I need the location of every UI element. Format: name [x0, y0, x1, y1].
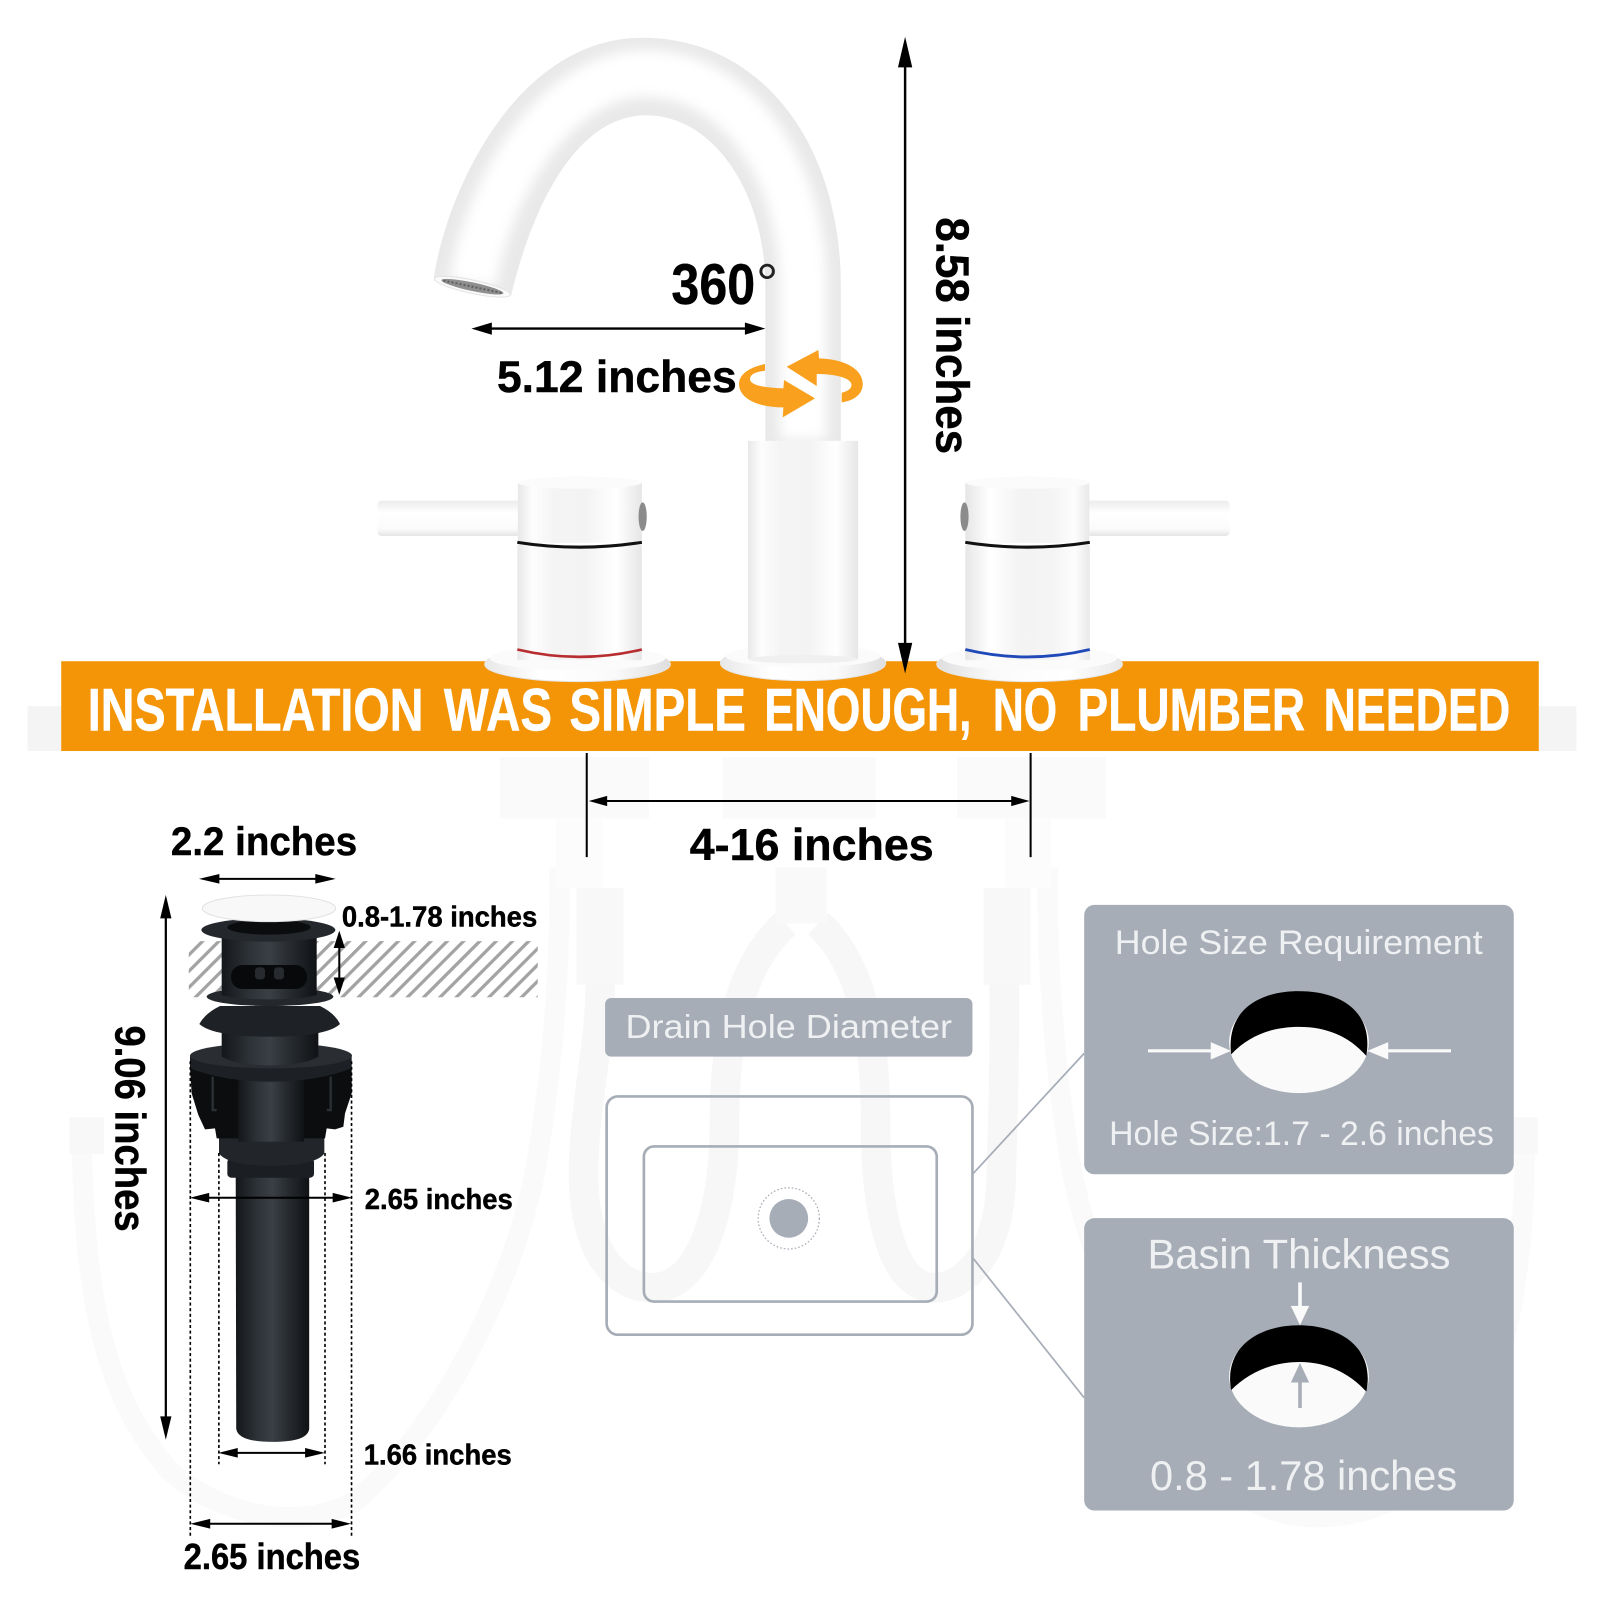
- aerator: [433, 272, 512, 301]
- lower lip: [207, 987, 333, 1006]
- top flange: [201, 918, 335, 942]
- banner headline: SIMPLE: [569, 677, 746, 744]
- heading: Hole Size Requirement: [1115, 924, 1483, 962]
- arrow: handle spread: [587, 753, 1031, 857]
- arrow: drain height: [160, 895, 171, 1440]
- cage center: [238, 1078, 304, 1142]
- banner headline: [88, 677, 1510, 744]
- label: 2.65 inches: 2.65 inches: [365, 1184, 513, 1216]
- center column: [720, 441, 886, 681]
- pop-up drain: [190, 895, 352, 1442]
- label: 8.58 inches: 8.58 inches: [927, 217, 979, 454]
- upper neck: [222, 1027, 318, 1065]
- drain hole: [769, 1199, 808, 1238]
- icon: 360 degree rotation arrows: [739, 350, 863, 417]
- arrow: spout reach: [471, 322, 765, 335]
- size text: Hole Size:1.7 - 2.6 inches: [1109, 1115, 1494, 1153]
- arrow: bottom width: [190, 1519, 351, 1529]
- label: 360 degrees: °: [756, 252, 778, 314]
- size text: 0.8 - 1.78 inches: [1150, 1452, 1457, 1499]
- spout: [434, 38, 841, 442]
- faint counter band: [28, 706, 1577, 751]
- large ring band: [190, 1055, 352, 1082]
- cage rib lines: [213, 1077, 331, 1110]
- label: 9.06 inches: 9.06 inches: [105, 1026, 153, 1232]
- arrow: tube width: [218, 1448, 325, 1458]
- label: 5.12 inches: 5.12 inches: [497, 351, 737, 402]
- panel: hole size requirement: [1084, 905, 1514, 1174]
- tube: [236, 1173, 309, 1442]
- label: 2.2 inches: 2.2 inches: [171, 820, 357, 864]
- banner headline: INSTALLATION: [88, 677, 423, 744]
- icon: basin section: [1229, 1282, 1369, 1427]
- arrow: flange width: [190, 1193, 352, 1203]
- label: 1.66 inches: 1.66 inches: [364, 1439, 512, 1471]
- banner headline: WAS: [444, 677, 552, 744]
- left handle: [378, 477, 670, 682]
- arrow: drain cap width: [199, 874, 336, 884]
- banner headline: NEEDED: [1323, 677, 1510, 744]
- arrow: basin thickness on drain: [334, 931, 345, 995]
- upper drain body: [190, 895, 352, 1178]
- label: 0.8-1.78 inches: 0.8-1.78 inches: [342, 902, 537, 934]
- faucet: [378, 38, 1230, 682]
- drain dotted ring: [758, 1188, 819, 1249]
- inner basin: [644, 1146, 937, 1302]
- outer sink: [607, 1096, 972, 1335]
- lower collar: [219, 1137, 324, 1166]
- label: bottom 2.65 inches: 2.65 inches: [184, 1537, 360, 1577]
- stem recess: [227, 920, 311, 935]
- hatched basin section: [189, 941, 538, 997]
- outer cage tabs: [190, 1068, 352, 1138]
- body: [222, 937, 317, 999]
- banner headline: ENOUGH,: [764, 677, 971, 744]
- arrow: faucet height: [898, 37, 912, 673]
- dotted guide lines: [190, 1061, 352, 1536]
- panel: drain hole diameter heading: Drain Hole Diameter: [626, 1009, 952, 1046]
- banner headline: NO: [993, 677, 1057, 744]
- orange banner: [61, 661, 1539, 751]
- panel: drain hole diameter heading: [605, 998, 972, 1057]
- thread: [227, 1158, 314, 1178]
- cone flange: [199, 1006, 340, 1037]
- right handle: [937, 477, 1230, 682]
- sink diagram: [607, 1096, 972, 1335]
- white cap: [202, 895, 336, 922]
- label: 360 degrees: 360: [671, 253, 755, 317]
- heading: Basin Thickness: [1147, 1230, 1451, 1277]
- icon: hole: [1148, 991, 1451, 1093]
- overflow slot: [231, 965, 307, 989]
- panel: basin thickness: [1084, 1218, 1514, 1511]
- banner headline: PLUMBER: [1078, 677, 1305, 744]
- faint hoses and fittings behind the content: [69, 757, 1538, 1517]
- large ring top: [190, 1043, 352, 1068]
- label: 4-16 inches: 4-16 inches: [690, 819, 934, 870]
- connector lines: [972, 1053, 1084, 1398]
